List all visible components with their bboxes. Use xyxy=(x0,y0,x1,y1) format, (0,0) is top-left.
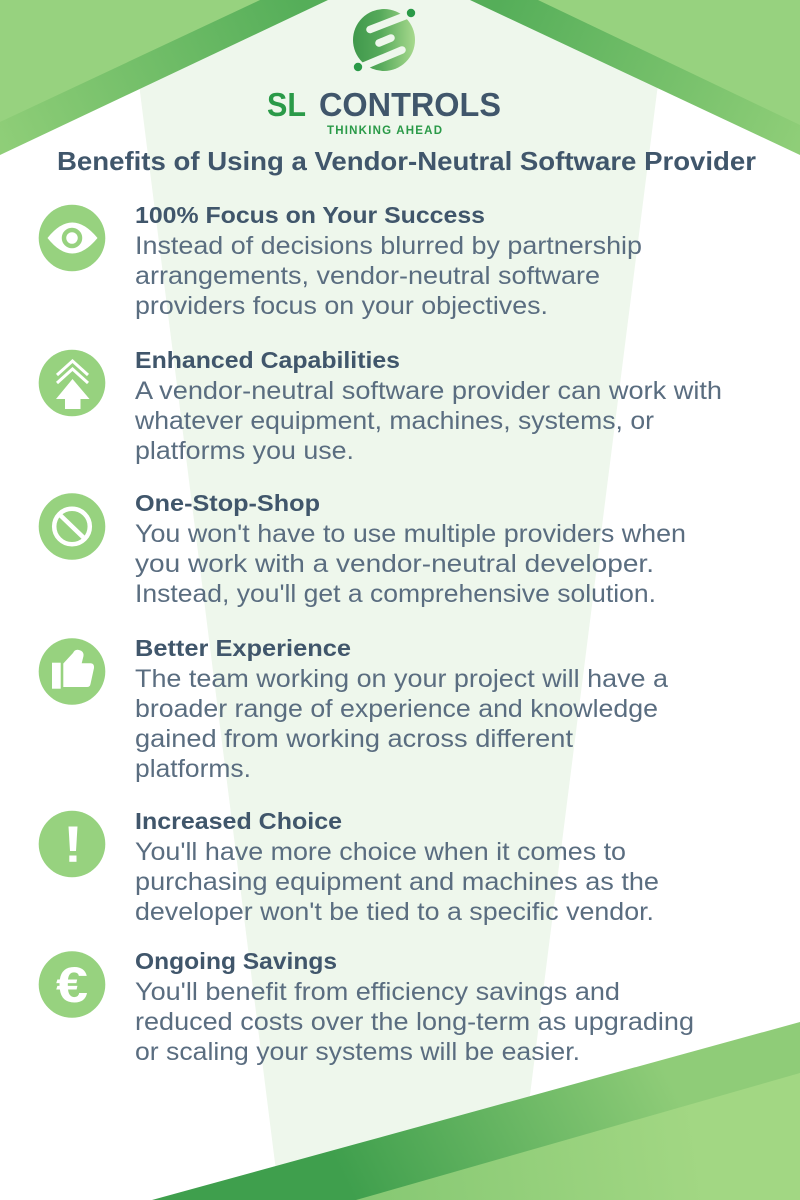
body text: Instead, you'll get a comprehensive solution. xyxy=(135,580,656,608)
body text: providers focus on your objectives. xyxy=(135,292,548,320)
heading: Enhanced Capabilities xyxy=(135,347,400,373)
logo wordmark: controls: CONTROLS xyxy=(319,86,501,123)
body text: You'll have more choice when it comes to xyxy=(135,838,626,866)
background: top-right corner wedge xyxy=(538,0,800,125)
panel: better experience xyxy=(39,635,668,783)
body text: You'll benefit from efficiency savings and xyxy=(135,978,620,1006)
heading: One-Stop-Shop xyxy=(135,490,320,516)
body text: gained from working across different xyxy=(135,725,573,753)
body text xyxy=(135,232,642,320)
heading: 100% Focus on Your Success xyxy=(135,202,485,228)
background: bottom wedge xyxy=(356,1073,800,1200)
body text: reduced costs over the long-term as upgrading xyxy=(135,1008,694,1036)
icon: euro: € xyxy=(56,957,88,1013)
icon: thumbs up xyxy=(39,638,105,705)
panel: ongoing savings xyxy=(39,948,694,1066)
background: top-right corner band xyxy=(470,0,800,155)
logo tagline: THINKING AHEAD xyxy=(327,125,442,137)
icon: eye xyxy=(39,205,105,271)
body text: platforms you use. xyxy=(135,437,354,465)
body text: broader range of experience and knowledge xyxy=(135,695,658,723)
heading: Better Experience xyxy=(135,635,351,661)
icon: prohibited sign xyxy=(39,493,105,560)
body text xyxy=(134,377,722,465)
icon: up arrow xyxy=(39,350,105,416)
heading: Ongoing Savings xyxy=(135,948,337,974)
body text xyxy=(135,520,686,608)
icon: euro xyxy=(39,951,105,1018)
body text: or scaling your systems will be easier. xyxy=(135,1038,580,1066)
body text xyxy=(135,978,694,1066)
body text: you work with a vendor-neutral developer. xyxy=(135,550,654,578)
body text: You won't have to use multiple providers when xyxy=(135,520,686,548)
logo mark xyxy=(353,9,415,71)
logo wordmark: SL: SL xyxy=(267,86,306,123)
background: pale centre beam xyxy=(128,0,672,1200)
body text: whatever equipment, machines, systems, or xyxy=(134,407,654,435)
body text: A vendor-neutral software provider can work with xyxy=(135,377,722,405)
body text xyxy=(135,665,668,783)
body text: The team working on your project will have a xyxy=(135,665,668,693)
icon: exclamation mark xyxy=(39,811,105,877)
title: Benefits of Using a Vendor-Neutral Software Provider xyxy=(57,146,756,176)
background: top-left corner wedge xyxy=(0,0,260,122)
panel: one-stop-shop xyxy=(39,490,686,608)
panel: 100% focus xyxy=(39,202,642,320)
heading: Increased Choice xyxy=(135,808,342,834)
body text: Instead of decisions blurred by partnership xyxy=(135,232,642,260)
background: top-left corner band xyxy=(0,0,328,155)
panel: enhanced capabilities xyxy=(39,347,722,465)
body text: developer won't be tied to a specific vendor. xyxy=(135,898,654,926)
background: bottom band xyxy=(152,1022,800,1200)
logo: SL Controls xyxy=(267,9,501,137)
body text xyxy=(135,838,659,926)
body text: purchasing equipment and machines as the xyxy=(135,868,659,896)
body text: arrangements, vendor-neutral software xyxy=(135,262,600,290)
body text: platforms. xyxy=(135,755,251,783)
panel: increased choice xyxy=(39,808,659,926)
